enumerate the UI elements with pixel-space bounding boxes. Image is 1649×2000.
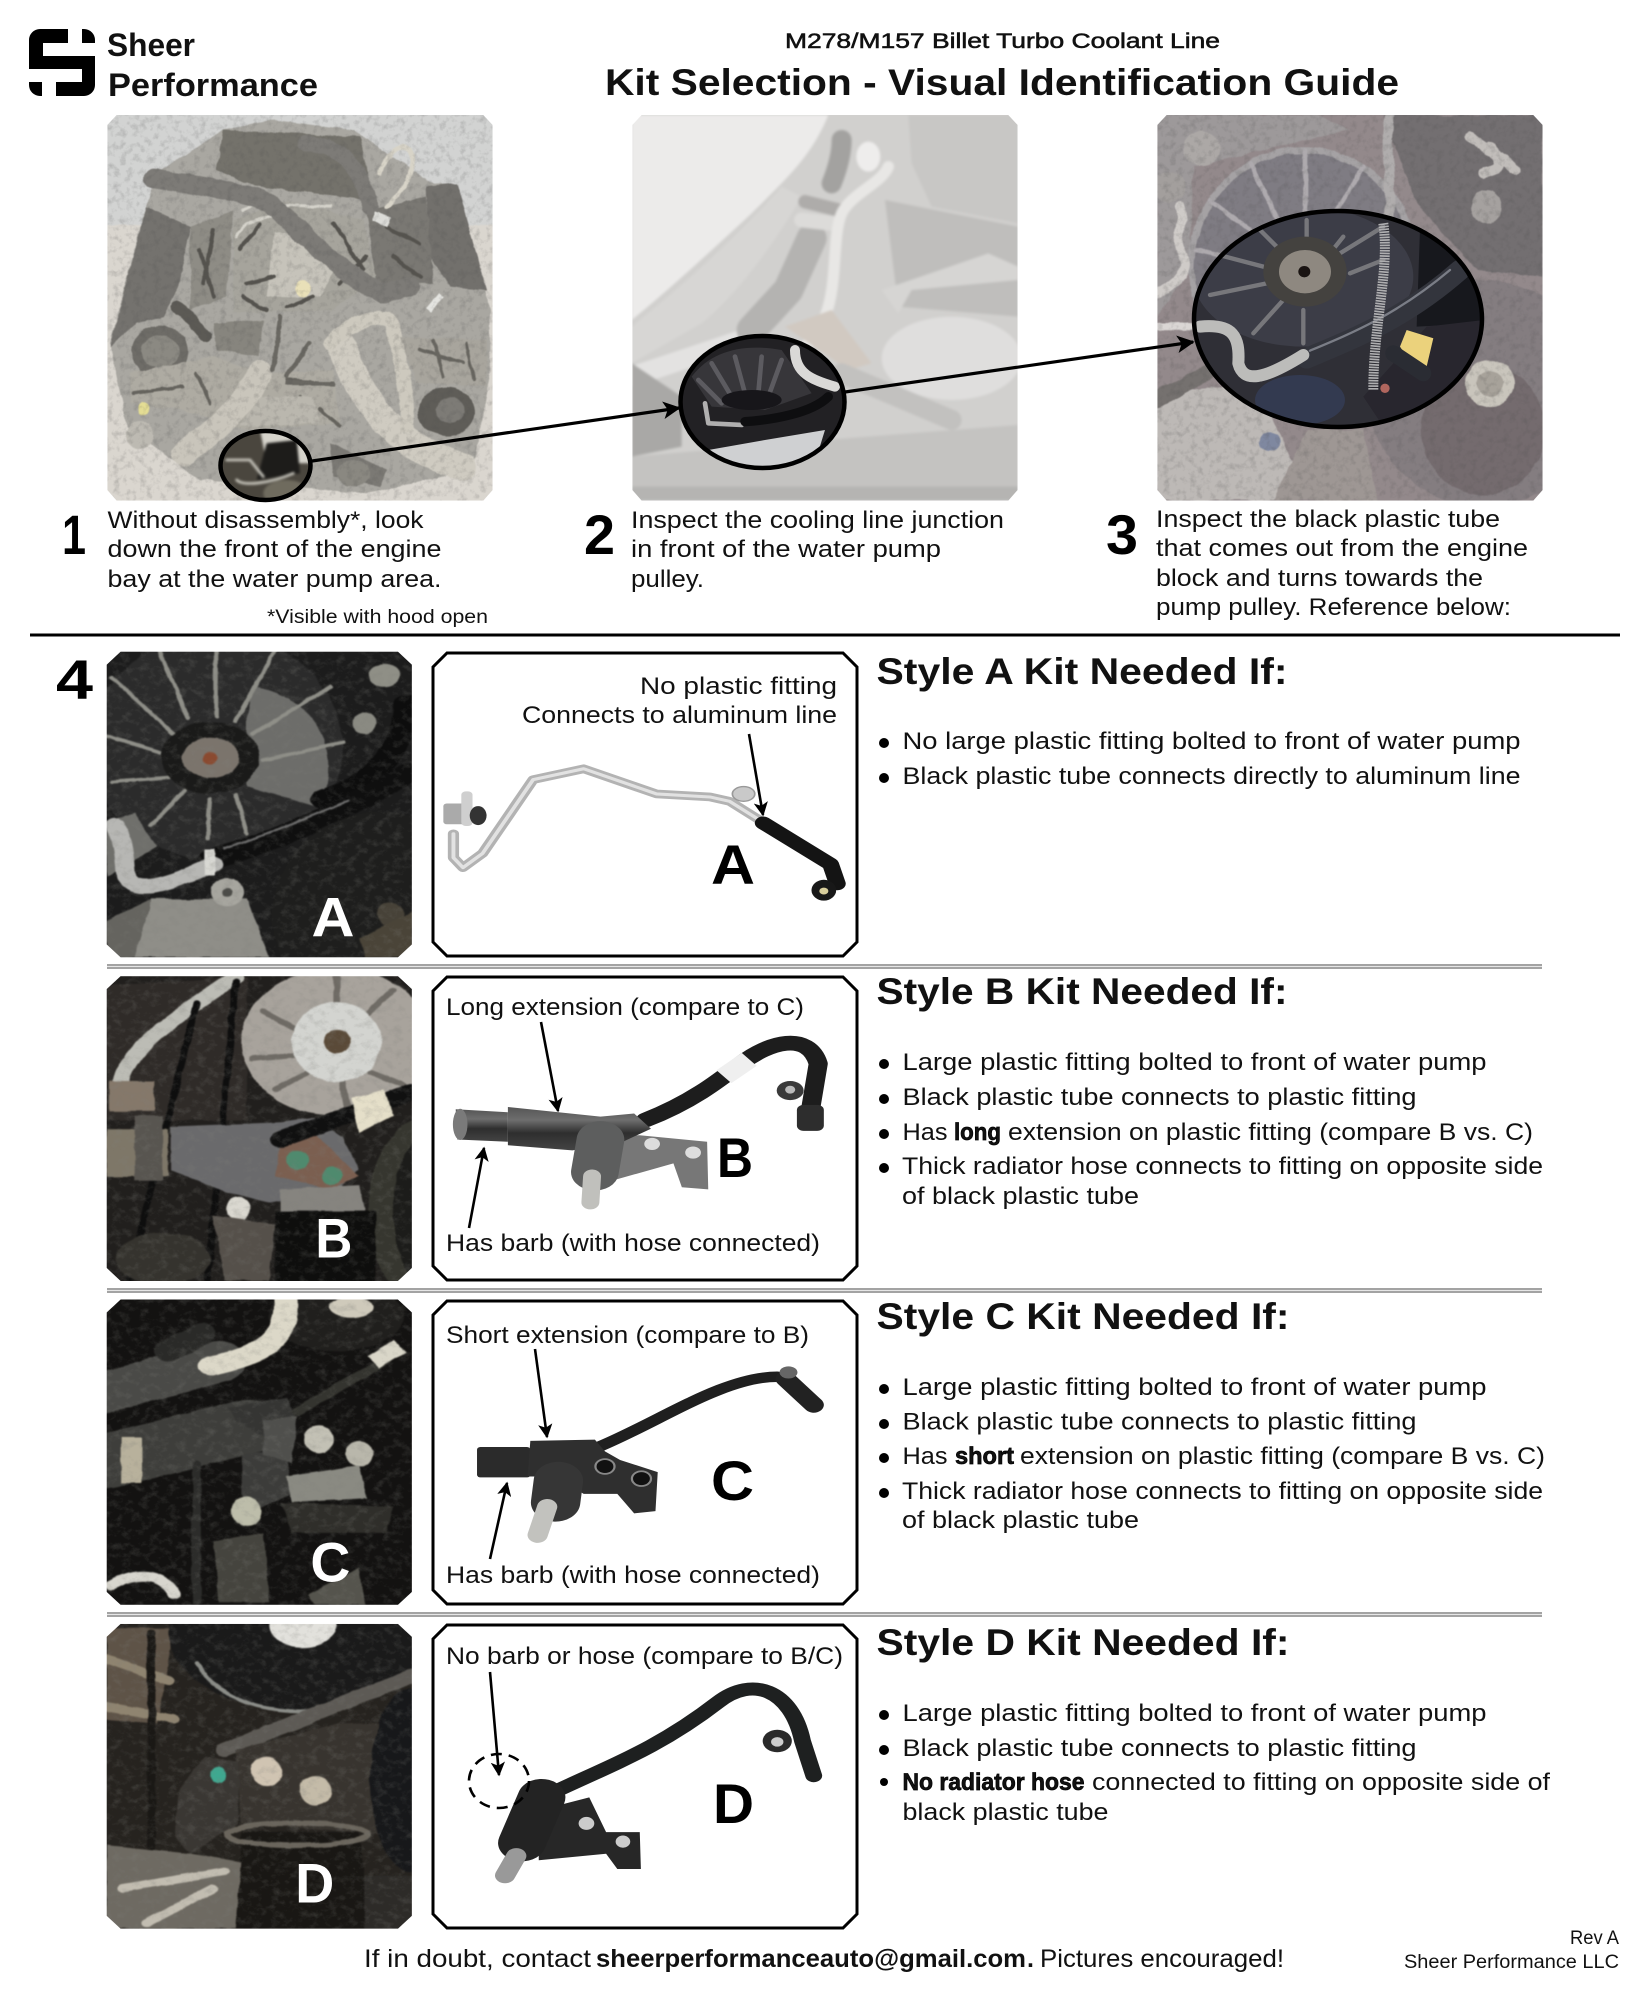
bullet list: Thick radiator hose connects to fitting on opposite side <box>902 1153 1543 1180</box>
Style A criteria <box>876 651 1520 790</box>
letter B on photo: B <box>315 1207 352 1270</box>
box outline <box>433 977 857 1280</box>
photo A <box>106 652 412 958</box>
diagram box A <box>433 653 857 956</box>
bullet list: Large plastic fitting bolted to front of water pump <box>902 1049 1486 1076</box>
step 3 instructions: block and turns towards the <box>1156 565 1483 592</box>
brand name: Sheer <box>107 27 195 63</box>
step 3 instructions: Inspect the black plastic tube <box>1156 506 1500 533</box>
callout arrow: barb <box>469 1148 484 1228</box>
step 1 instructions: down the front of the engine <box>108 536 441 563</box>
photo C <box>106 1300 412 1605</box>
callout arrow: missing barb <box>490 1672 499 1775</box>
box outline <box>433 1625 857 1928</box>
bullet list: long <box>954 1119 1001 1146</box>
bullet list <box>879 1374 1545 1534</box>
bullet list: connected to fitting on opposite side of <box>1092 1769 1550 1796</box>
step 1 instructions: Without disassembly*, look <box>108 507 425 534</box>
step 3 instructions <box>1156 506 1528 621</box>
callout arrow <box>749 734 763 815</box>
footer contact line: . <box>1027 1945 1034 1973</box>
Style B criteria <box>876 971 1543 1210</box>
bullet list: of black plastic tube <box>902 1507 1139 1534</box>
brand name <box>107 27 318 103</box>
bullet list: Large plastic fitting bolted to front of water pump <box>902 1700 1486 1727</box>
photo 2: cooling line junction with inset circle <box>625 110 1025 510</box>
step 1 instructions <box>108 507 441 593</box>
inset: tube close-up <box>1190 207 1487 430</box>
diagram box D <box>433 1625 857 1928</box>
label text <box>522 673 837 729</box>
label: barb: Has barb (with hose connected) <box>446 1230 820 1257</box>
step 3 instructions: that comes out from the engine <box>1156 535 1528 562</box>
step 2 instructions <box>631 507 1004 593</box>
arrow: photo 1 to photo 2 <box>312 408 679 461</box>
box outline <box>433 653 857 956</box>
step number 4: 4 <box>56 648 93 711</box>
diagram box B <box>433 977 857 1280</box>
footer contact line <box>364 1945 1284 1973</box>
callout arrow: extension <box>535 1349 547 1437</box>
product: aluminum line A <box>443 769 837 901</box>
step 2 instructions: Inspect the cooling line junction <box>631 507 1004 534</box>
step 2 text <box>584 503 1004 593</box>
step number 1: 1 <box>62 503 86 566</box>
footer contact line: If in doubt, contact <box>364 1945 591 1973</box>
footer contact line: Pictures encouraged! <box>1040 1945 1284 1973</box>
inset ring 1 <box>220 431 310 500</box>
label: no barb: No barb or hose (compare to B/C) <box>446 1643 843 1670</box>
bullet list: short <box>955 1443 1014 1470</box>
heading: Style C Kit Needed If: <box>876 1296 1290 1337</box>
letter C on photo: C <box>310 1530 350 1593</box>
letter A on photo: A <box>311 886 354 949</box>
bullet list: black plastic tube <box>902 1799 1108 1826</box>
bullet list: Black plastic tube connects to plastic fitting <box>902 1084 1416 1111</box>
label text: No plastic fitting <box>640 673 837 700</box>
bullet list: Has <box>902 1443 948 1470</box>
bullet list: Black plastic tube connects directly to aluminum line <box>902 763 1520 790</box>
bullet list: No radiator hose <box>902 1769 1084 1796</box>
revision and company: Rev A <box>1570 1928 1619 1949</box>
label text: Connects to aluminum line <box>522 702 837 729</box>
revision and company: Sheer Performance LLC <box>1404 1952 1619 1973</box>
product: fitting B <box>453 1043 824 1202</box>
inset ring 3 <box>1194 211 1482 427</box>
bullet list: extension on plastic fitting (compare B vs. C) <box>1020 1443 1545 1470</box>
dashed circle: missing barb <box>469 1754 529 1808</box>
bullet list: Black plastic tube connects to plastic fitting <box>902 1408 1416 1436</box>
photo B <box>106 976 412 1281</box>
photo 1: full engine with inset circle <box>100 110 500 510</box>
brand name: Performance <box>108 67 318 103</box>
title block <box>605 30 1399 103</box>
subtitle: M278/M157 Billet Turbo Coolant Line <box>785 30 1220 53</box>
product: fitting C <box>477 1366 814 1535</box>
big letter A: A <box>711 833 755 896</box>
label: long extension: Long extension (compare to C) <box>446 994 804 1021</box>
bullet list <box>879 1700 1550 1826</box>
heading: Style A Kit Needed If: <box>876 651 1288 692</box>
callout arrow: barb <box>490 1483 507 1559</box>
diagram box C <box>433 1301 857 1604</box>
label: barb: Has barb (with hose connected) <box>446 1562 820 1589</box>
step 2 instructions: pulley. <box>631 566 704 593</box>
bullet list <box>879 728 1520 790</box>
footer contact line: sheerperformanceauto@gmail.com <box>596 1945 1026 1973</box>
step number 3: 3 <box>1106 503 1138 566</box>
inset ring 2 <box>680 336 844 468</box>
big letter D: D <box>713 1772 754 1835</box>
icon: S mark <box>29 29 95 96</box>
photo 3: black plastic tube with inset circle <box>1157 115 1543 501</box>
arrow: photo 2 to photo 3 <box>845 342 1193 392</box>
bullet list <box>879 1049 1543 1210</box>
bullet list: extension on plastic fitting (compare B vs. C) <box>1008 1119 1533 1146</box>
footnote: *Visible with hood open <box>267 607 488 628</box>
heading: Style D Kit Needed If: <box>876 1622 1290 1663</box>
letter D on photo: D <box>295 1851 334 1914</box>
main title: Kit Selection - Visual Identification Guide <box>605 62 1399 103</box>
heading: Style B Kit Needed If: <box>876 971 1288 1012</box>
product: fitting D <box>505 1689 814 1875</box>
Style C criteria <box>876 1296 1545 1534</box>
Style D criteria <box>876 1622 1550 1826</box>
bullet list: No large plastic fitting bolted to front of water pump <box>902 728 1520 755</box>
callout arrow: extension <box>541 1022 558 1111</box>
photo D <box>106 1624 412 1929</box>
bullet list: Black plastic tube connects to plastic fitting <box>902 1735 1416 1762</box>
step 3 instructions: pump pulley. Reference below: <box>1156 594 1511 621</box>
step 3 text <box>1106 503 1528 621</box>
bullet list: Thick radiator hose connects to fitting on opposite side <box>902 1478 1543 1505</box>
step number 2: 2 <box>584 503 615 566</box>
big letter C: C <box>711 1449 754 1512</box>
step 1 instructions: bay at the water pump area. <box>108 566 441 593</box>
bullet list: of black plastic tube <box>902 1183 1139 1210</box>
revision and company <box>1404 1928 1619 1973</box>
inset: water pump zoom <box>222 433 308 498</box>
bullet list: Has <box>902 1119 948 1146</box>
step 1 text <box>62 503 488 628</box>
inset: cooling line junction zoom <box>682 338 842 466</box>
big letter B: B <box>717 1126 753 1189</box>
bullet list: Large plastic fitting bolted to front of water pump <box>902 1374 1486 1401</box>
logo: Sheer Performance <box>29 27 318 103</box>
label: short extension: Short extension (compare to B) <box>446 1322 809 1349</box>
box outline <box>433 1301 857 1604</box>
step 2 instructions: in front of the water pump <box>631 536 941 563</box>
